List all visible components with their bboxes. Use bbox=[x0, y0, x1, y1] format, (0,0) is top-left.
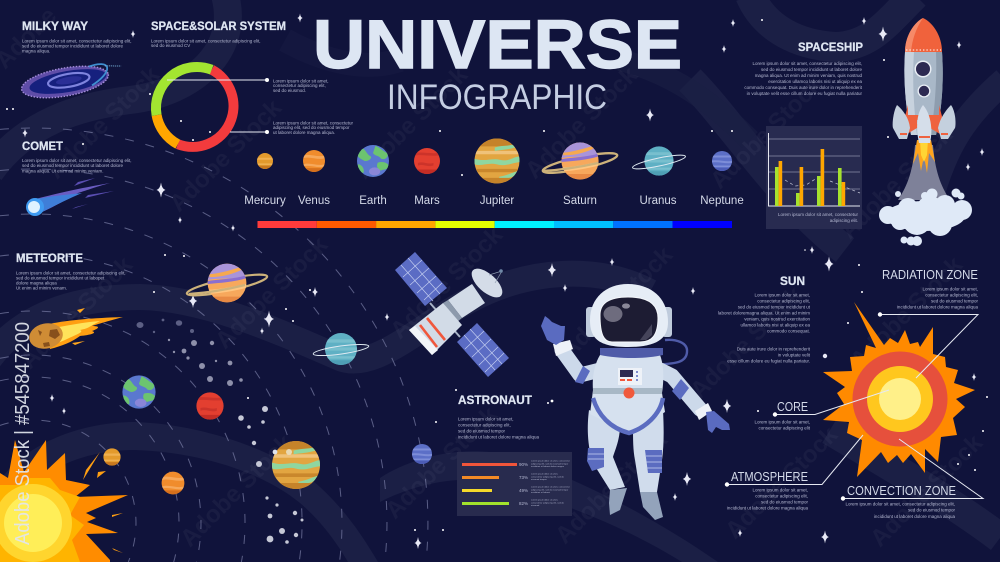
watermark text: Adobe Stock bbox=[42, 61, 165, 184]
planet: neptune bbox=[712, 151, 732, 171]
sun radiation layer bbox=[867, 366, 933, 432]
planet labels: Mars bbox=[414, 195, 440, 207]
planet labels: Neptune bbox=[700, 195, 744, 207]
planet labels: Mercury bbox=[244, 195, 286, 207]
stat notes: incididunt ut laboret dolore magna bbox=[531, 465, 565, 468]
callout: radiation zone: consectetur adipiscing elit, bbox=[925, 292, 978, 298]
stat values: 49% bbox=[519, 488, 528, 493]
stat notes: eiusmod tempor bbox=[531, 478, 547, 481]
panel: meteorite: METEORITE bbox=[16, 253, 83, 265]
watermark text: Adobe Stock bbox=[685, 281, 808, 404]
panel: milky way: sed do eiusmod tempor incididunt ut laboret dolore bbox=[22, 44, 124, 48]
satellite dish bbox=[467, 264, 507, 302]
satellite stripes bbox=[420, 318, 445, 347]
panel: sun text: SUN bbox=[780, 276, 805, 288]
donut callouts: sed do eiusmod. bbox=[273, 88, 306, 93]
sun convection layer bbox=[852, 352, 948, 446]
orbit dashes bbox=[0, 128, 428, 562]
panel: comet: magna aliqua. Ut enim ad minim veniam. bbox=[22, 168, 104, 174]
panel: meteorite bbox=[16, 253, 126, 352]
callout: convection zone: sed do eiusmod tempor bbox=[908, 508, 955, 512]
callout: core: CORE bbox=[777, 399, 808, 414]
callout: radiation zone: sed do eiusmod tempor bbox=[931, 298, 978, 304]
callout: core: Lorem ipsum dolor sit amet, bbox=[754, 420, 810, 424]
astronaut button bbox=[624, 388, 634, 398]
planet labels: Jupiter bbox=[480, 195, 514, 207]
panel: astronaut text: ASTRONAUT bbox=[458, 395, 532, 407]
panel: meteorite: sed do eiusmod tempor incididunt ut labopet bbox=[16, 276, 105, 280]
panel: astronaut text: sed do eiusmod tempor bbox=[458, 428, 506, 434]
watermark text: Adobe Stock bbox=[350, 61, 473, 184]
planet: jupiter bbox=[474, 138, 520, 184]
planet: earth bbox=[357, 145, 389, 177]
callout: convection zone: Lorem ipsum dolor sit amet, consectetur adipiscing elit, bbox=[845, 502, 955, 506]
solar system planets bbox=[103, 264, 432, 494]
stat values bbox=[519, 462, 528, 506]
callout: convection zone bbox=[841, 439, 983, 519]
panel: spaceship text: commodo consequat. Duis aute irure dolor in reprehenderit bbox=[744, 85, 863, 90]
panel: milky way: MILKY WAY bbox=[22, 21, 88, 33]
solar panel left bbox=[395, 252, 447, 306]
rocket body bbox=[904, 52, 943, 135]
stat notes: adipiscing elit, sed do eiusmod tempor bbox=[531, 462, 568, 466]
diagram: sun anatomy bbox=[823, 302, 975, 477]
icon: galaxy bbox=[19, 58, 125, 103]
stat notes: eiusmod bbox=[531, 505, 540, 507]
stat values: 73% bbox=[519, 475, 528, 480]
planet labels: Earth bbox=[359, 195, 387, 207]
rocket red fins bbox=[903, 105, 944, 134]
panel: sun text: commodo consequat. bbox=[767, 328, 810, 334]
planet: saturn bbox=[186, 264, 268, 302]
panel: sun text: Duis aute irure dolor in reprehenderit bbox=[737, 346, 811, 352]
planet: neptune bbox=[412, 444, 432, 464]
astronaut left glove bbox=[541, 316, 565, 345]
panel: space and solar system bbox=[151, 21, 354, 147]
planet row bbox=[257, 138, 732, 184]
panel: sun text: Lorem ipsum dolor sit amet, bbox=[754, 292, 810, 298]
watermark text: Adobe Stock bbox=[720, 421, 843, 544]
astronaut collar bbox=[600, 348, 663, 358]
panel: spaceship text: sed do eiusmod tempor incididunt ut laboret dolore bbox=[761, 67, 862, 72]
astronaut torso bbox=[590, 355, 665, 434]
title bbox=[313, 6, 682, 117]
title: UNIVERSE bbox=[313, 6, 682, 83]
stat notes: Lorem ipsum dolor sit amet, consectetur bbox=[531, 486, 570, 488]
stat notes: Lorem ipsum dolor sit amet, bbox=[531, 472, 558, 476]
stat values: 90% bbox=[519, 462, 528, 467]
satellite body bbox=[448, 284, 485, 318]
planet: jupiter bbox=[272, 441, 320, 489]
donut callouts: ut laboret dolore magna aliqua. bbox=[273, 130, 335, 135]
rocket portholes bbox=[914, 60, 932, 78]
callout: atmosphere: Lorem ipsum dolor sit amet, bbox=[752, 488, 808, 492]
panel: comet bbox=[22, 141, 132, 216]
callout: convection zone: CONVECTION ZONE bbox=[847, 483, 956, 498]
donut chart bbox=[156, 67, 233, 147]
stat notes: adipiscing elit, sed do eiusmod tempor bbox=[531, 488, 568, 492]
spectrum bar bbox=[258, 221, 732, 228]
panel: sun text: sed do eiusmod tempor incididunt ut bbox=[738, 304, 811, 310]
rocket cloud bbox=[879, 188, 972, 246]
sun flare bbox=[823, 302, 975, 477]
astronaut knee pads bbox=[587, 448, 604, 471]
solar panel right bbox=[457, 323, 509, 377]
stat bars bbox=[462, 463, 517, 505]
astronaut visor bbox=[600, 297, 658, 342]
callout: radiation zone bbox=[878, 267, 978, 378]
panel: sun text bbox=[718, 276, 811, 364]
panel: spaceship text bbox=[744, 42, 863, 96]
callout: radiation zone: Lorem ipsum dolor sit amet, bbox=[922, 286, 978, 292]
panel: astronaut text: Lorem ipsum dolor sit amet, bbox=[458, 416, 514, 422]
callout: core: consectetur adipiscing elit bbox=[758, 426, 811, 430]
panel: space and solar system: SPACE&SOLAR SYSTEM bbox=[151, 21, 286, 33]
panel: meteorite: Ut enim ad minim venam. bbox=[16, 286, 67, 290]
callout: atmosphere: consectetur adipiscing elit, bbox=[755, 494, 808, 498]
donut callouts: consectetur adipiscing elit, bbox=[273, 83, 326, 88]
panel: comet: sed do eiusmod tempor incididunt ut laboret dolore bbox=[22, 163, 124, 168]
astronaut right arm bbox=[660, 370, 700, 409]
bar chart: spaceship: adipiscing elit. bbox=[830, 218, 858, 223]
panel: spaceship text: SPACESHIP bbox=[798, 42, 863, 54]
planet: mars bbox=[196, 392, 224, 420]
watermark text: Adobe Stock bbox=[520, 61, 643, 184]
rocket exhaust bbox=[898, 145, 950, 200]
callout: radiation zone: RADIATION ZONE bbox=[882, 267, 978, 282]
astronaut harness bbox=[593, 398, 663, 433]
planet labels: Venus bbox=[298, 195, 330, 207]
panel: spaceship text: Lorem ipsum dolor sit amet, consectetur adipiscing elit, bbox=[752, 61, 862, 66]
bar chart: spaceship: Lorem ipsum dolor sit amet, consectetur bbox=[778, 212, 858, 217]
vertical watermark: Adobe Stock | #545847200 bbox=[12, 322, 34, 545]
planet: venus bbox=[162, 472, 184, 494]
icon: comet bbox=[26, 178, 114, 216]
panel: astronaut text: consectetur adipiscing elit, bbox=[458, 422, 511, 428]
callout: atmosphere: ATMOSPHERE bbox=[731, 469, 808, 484]
astronaut helmet bbox=[586, 307, 596, 337]
stat notes: consectetur adipiscing elit, sed do bbox=[531, 502, 565, 504]
panel: sun text: in voluptate velit bbox=[778, 352, 811, 358]
panel: comet: Lorem ipsum dolor sit amet, consectetur adipiscing elit, bbox=[22, 158, 132, 163]
watermark text: Adobe Stock bbox=[550, 426, 673, 549]
stat notes: consectetur adipiscing elit, sed do bbox=[531, 476, 565, 478]
watermark text: Adobe Stock bbox=[210, 231, 333, 354]
panel: astronaut stats bbox=[457, 452, 572, 516]
astronaut legs bbox=[588, 410, 625, 490]
icon: meteorite bbox=[27, 308, 123, 352]
callout: atmosphere: sed do eiusmod tempor bbox=[761, 500, 808, 504]
panel: sun text: veniam, quis nostrud exercitation bbox=[744, 316, 810, 322]
icon: corner sun bbox=[0, 440, 128, 562]
panel: comet: COMET bbox=[22, 141, 63, 153]
rocket nose bbox=[905, 18, 942, 52]
astronaut right glove bbox=[706, 411, 730, 433]
callout: atmosphere: incididunt ut laboret dolore magna aliqua bbox=[727, 506, 808, 510]
rocket flame bbox=[913, 140, 935, 173]
panel: spaceship text: exercitation ullamco laboris nisi ut aliquip ex ea bbox=[768, 79, 862, 84]
sun core bbox=[879, 378, 921, 420]
planet: mercury bbox=[103, 448, 121, 466]
panel: sun text: esse cillum dolore eu fugiat nulla pariatur. bbox=[727, 358, 810, 364]
callout: convection zone: incididunt ut laboret dolore magna aliqua bbox=[874, 514, 955, 519]
panel: astronaut text bbox=[458, 395, 540, 440]
astronaut left arm bbox=[562, 350, 600, 375]
stat values: 82% bbox=[519, 501, 528, 506]
donut callouts: Lorem ipsum dolor sit amet, consectetur bbox=[273, 120, 354, 126]
rocket boosters bbox=[893, 105, 910, 139]
donut callouts bbox=[167, 78, 354, 135]
panel: sun text: laboret doloremagna aliqua. Ut enim ad minim bbox=[718, 310, 810, 316]
planet labels: Uranus bbox=[639, 195, 677, 207]
panel: space and solar system: Lorem ipsum dolor sit amet, consectetur adipiscing elit, bbox=[151, 38, 261, 44]
donut callouts: adipiscing elit, sed do eiusmod tempor bbox=[273, 125, 350, 130]
stat notes: incididunt ut laboret bbox=[531, 491, 550, 494]
panel: spaceship text: magna aliqua. Ut enim ad minim veniam, quis nostrud bbox=[755, 73, 862, 78]
panel: sun text: ullamco laboris nisi ut aliquip ex ea bbox=[740, 322, 810, 328]
asteroid belt bbox=[136, 319, 304, 544]
panel: space and solar system: sed do eiusmod CV bbox=[151, 43, 190, 48]
bar chart: spaceship bbox=[766, 126, 862, 229]
panel: astronaut text: incididunt ut laboret dolore magna aliqua bbox=[458, 434, 540, 440]
watermark text: Adobe Stock bbox=[865, 429, 988, 552]
panel: sun text: consectetur adipiscing elit, bbox=[757, 298, 810, 304]
astronaut chest panel bbox=[618, 368, 642, 385]
planet: earth bbox=[122, 375, 156, 409]
planet labels: Saturn bbox=[563, 195, 597, 207]
watermark text: Adobe Stock bbox=[380, 401, 503, 524]
astronaut boots bbox=[609, 488, 627, 515]
title: INFOGRAPHIC bbox=[387, 78, 607, 117]
planet: saturn bbox=[542, 142, 618, 180]
planet labels bbox=[244, 195, 744, 207]
watermark text: Adobe Stock bbox=[555, 241, 678, 364]
stat notes bbox=[531, 460, 570, 507]
callout: core bbox=[754, 390, 889, 430]
planet: venus bbox=[303, 150, 325, 172]
icon: astronaut bbox=[541, 284, 730, 520]
icon: satellite bbox=[395, 252, 509, 377]
watermark text: Adobe Stock bbox=[385, 221, 508, 344]
watermark text: Adobe Stock bbox=[164, 94, 287, 217]
astronaut hose bbox=[637, 340, 687, 367]
planet: uranus bbox=[313, 333, 369, 365]
donut callouts: Lorem ipsum dolor sit amet, bbox=[273, 78, 329, 84]
icon: rocket bbox=[879, 18, 972, 246]
planet: mercury bbox=[257, 153, 273, 169]
panel: milky way: magna aliqua. bbox=[22, 48, 50, 54]
panel: meteorite: Lorem ipsum dolor sit amet, consectetur adipiscing elit, bbox=[16, 270, 126, 276]
stat notes: Lorem ipsum dolor sit amet, bbox=[531, 498, 558, 502]
watermark text: Adobe Stock bbox=[705, 71, 828, 194]
panel: milky way bbox=[19, 21, 132, 103]
panel: meteorite: dolore magna aliqua bbox=[16, 280, 57, 286]
watermark text: Adobe Stock bbox=[835, 121, 958, 244]
watermark text: Adobe Stock bbox=[175, 429, 298, 552]
watermark text: Adobe Stock bbox=[845, 251, 968, 374]
watermark text: Adobe Stock bbox=[15, 251, 138, 374]
satellite connector bbox=[430, 303, 460, 337]
callout: radiation zone: incididunt ut laboret dolore magna aliqua bbox=[897, 304, 978, 310]
stat notes: Lorem ipsum dolor sit amet, consectetur bbox=[531, 460, 570, 462]
callout: atmosphere bbox=[725, 435, 863, 510]
planet: uranus bbox=[632, 146, 686, 176]
planet: mars bbox=[414, 148, 440, 174]
panel: spaceship text: in voluptate velit esse cillum dolore eu fugiat nulla pariatur bbox=[747, 91, 862, 96]
panel: milky way: Lorem ipsum dolor sit amet, consectetur adipiscing elit, bbox=[22, 38, 132, 44]
